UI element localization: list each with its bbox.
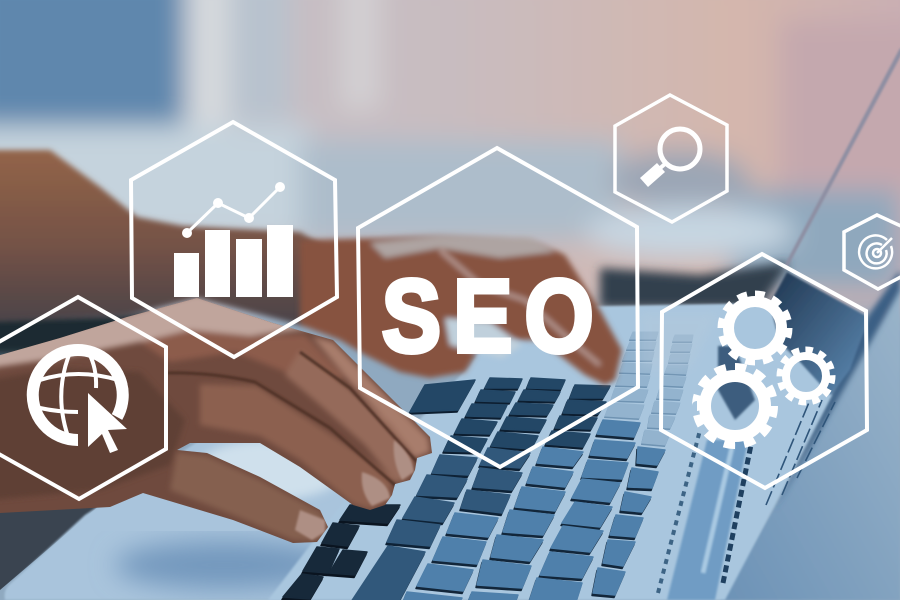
icon: globe with cursor (33, 350, 127, 453)
screen panel (770, 272, 868, 395)
dark keys beside the hand (409, 378, 610, 454)
front hand (0, 290, 440, 550)
fingernails (295, 440, 414, 540)
laptop silver deck (268, 303, 832, 600)
palm rest (5, 420, 400, 600)
far keys (604, 332, 693, 446)
side key stripes (766, 400, 835, 505)
finger two (200, 384, 392, 509)
finger three (285, 350, 414, 483)
shadow beneath the rear arm (0, 312, 150, 357)
hexagon: SEO (358, 148, 638, 467)
table surface right (720, 283, 900, 600)
hexagon frames (0, 95, 900, 499)
hinge strip (667, 440, 748, 600)
hinge highlight (703, 443, 733, 573)
band of laptop shadow (775, 270, 900, 510)
hexagon: search (615, 95, 727, 222)
back of hand base (0, 290, 440, 550)
speaker dots right (723, 440, 752, 583)
icon: target (859, 235, 892, 268)
hexagon: target (844, 215, 900, 289)
hexagon: gears (661, 254, 867, 488)
pale top of hand (0, 294, 310, 368)
main keys (399, 420, 665, 600)
finger one (170, 452, 328, 541)
hexagon: analytics (131, 122, 337, 357)
hexagon: web (0, 297, 166, 499)
knuckle shading (140, 330, 345, 378)
washed far deck (640, 312, 720, 370)
black arrow keys (282, 505, 400, 600)
mid-dark keys (348, 448, 530, 600)
rear hand (300, 235, 622, 385)
blurred window backdrop (0, 0, 900, 310)
wrist shading (0, 368, 185, 500)
icon: gears (697, 294, 832, 444)
speaker dots left (658, 430, 700, 593)
screen edge line (783, 48, 900, 270)
cup shadow (600, 262, 790, 308)
rear arm (0, 150, 345, 325)
icon: bar chart with trend line (174, 182, 293, 297)
heading: SEO: SEO (382, 259, 593, 374)
dark notch at deck (718, 346, 755, 420)
finger creases (167, 352, 417, 486)
icon: magnifying glass (640, 129, 700, 187)
dark table corner left (0, 505, 100, 590)
finger four (312, 336, 430, 458)
